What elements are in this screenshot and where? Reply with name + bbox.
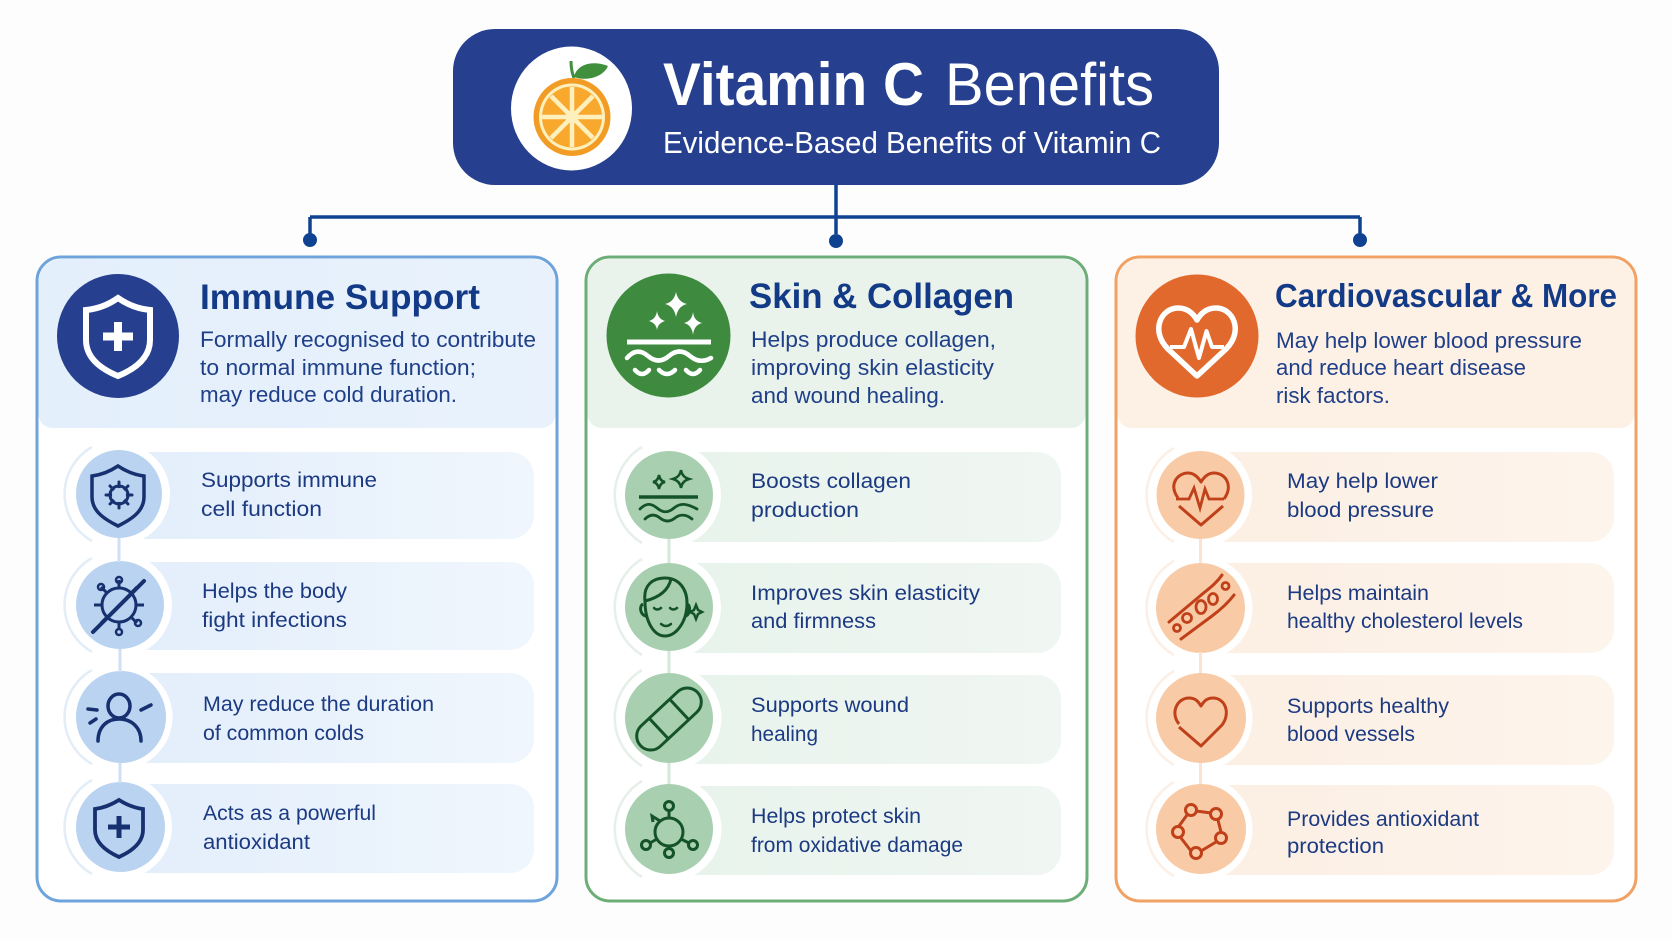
item: helps protect skin from oxidative damage: from oxidative damage — [751, 833, 963, 857]
panel header band — [588, 259, 1086, 428]
description: and reduce heart disease — [1276, 355, 1526, 380]
panel: cardiovascular and more — [1116, 257, 1636, 901]
item: helps maintain healthy cholesterol levels: healthy cholesterol levels — [1287, 609, 1523, 633]
item: supports healthy blood vessels — [1147, 666, 1614, 770]
description — [200, 327, 536, 407]
item: supports immune cell function — [65, 443, 534, 545]
item: may help lower blood pressure — [1147, 443, 1614, 547]
item: helps the body fight infections: fight infections — [202, 608, 347, 632]
item: supports healthy blood vessels: Supports healthy — [1287, 694, 1449, 718]
item: boosts collagen production: Boosts collagen — [751, 469, 911, 493]
description: Formally recognised to contribute — [200, 327, 536, 352]
item: supports immune cell function: cell function — [201, 497, 322, 521]
item: may reduce the duration of common colds: of common colds — [203, 721, 364, 745]
item: acts as a powerful antioxidant: antioxidant — [203, 830, 310, 854]
description: Helps produce collagen, — [751, 327, 996, 352]
item: provides antioxidant protection: Provides antioxidant — [1287, 807, 1479, 831]
description: May help lower blood pressure — [1276, 328, 1582, 353]
panel: skin and collagen — [586, 257, 1087, 901]
description: to normal immune function; — [200, 355, 476, 380]
item: helps the body fight infections: Helps the body — [202, 579, 347, 603]
item: improves skin elasticity and firmness — [615, 555, 1061, 659]
item: may reduce the duration of common colds: May reduce the duration — [203, 692, 434, 716]
panel header band — [1118, 259, 1635, 428]
item: supports wound healing — [615, 666, 1061, 770]
item: supports immune cell function: Supports immune — [201, 468, 377, 492]
panel: immune support — [37, 257, 557, 901]
item: helps protect skin from oxidative damage: Helps protect skin — [751, 804, 921, 828]
icon: shield with plus — [57, 274, 179, 398]
icon: heart with pulse — [1136, 274, 1258, 398]
heading: cardiovascular and more: Cardiovascular & More — [1275, 278, 1617, 315]
heading light part: Benefits — [945, 51, 1154, 118]
item: supports healthy blood vessels: blood vessels — [1287, 722, 1415, 746]
description: and wound healing. — [751, 383, 945, 408]
item: boosts collagen production — [615, 443, 1061, 547]
panel header band — [38, 259, 556, 428]
item: improves skin elasticity and firmness: Improves skin elasticity — [751, 581, 980, 605]
item: helps maintain healthy cholesterol levels — [1147, 556, 1614, 660]
description: risk factors. — [1276, 383, 1390, 408]
item: may reduce the duration of common colds — [65, 664, 534, 770]
heading: immune support: Immune Support — [200, 278, 480, 317]
item: helps protect skin from oxidative damage — [615, 776, 1061, 882]
item: supports wound healing: healing — [751, 722, 818, 746]
connector tree — [303, 185, 1367, 248]
description: improving skin elasticity — [751, 355, 994, 380]
heading: Vitamin C — [663, 51, 924, 118]
icon: orange slice — [511, 46, 632, 170]
item: provides antioxidant protection: protection — [1287, 834, 1384, 858]
subtitle: Evidence-Based Benefits of Vitamin C — [663, 125, 1161, 160]
item: may help lower blood pressure: May help lower — [1287, 469, 1438, 493]
item: may help lower blood pressure: blood pressure — [1287, 498, 1434, 522]
description: may reduce cold duration. — [200, 382, 457, 407]
item: boosts collagen production: production — [751, 498, 859, 522]
item: supports wound healing: Supports wound — [751, 693, 909, 717]
item: provides antioxidant protection — [1147, 776, 1614, 882]
item: acts as a powerful antioxidant — [65, 775, 534, 879]
icon: skin layers with sparkles — [606, 274, 730, 398]
description — [1276, 328, 1582, 408]
item: acts as a powerful antioxidant: Acts as a powerful — [203, 801, 376, 825]
item: helps maintain healthy cholesterol levels: Helps maintain — [1287, 581, 1429, 605]
heading: skin and collagen: Skin & Collagen — [749, 277, 1014, 316]
item: improves skin elasticity and firmness: and firmness — [751, 609, 876, 633]
title banner — [453, 29, 1219, 185]
item: helps the body fight infections — [65, 553, 534, 657]
description — [751, 327, 996, 408]
